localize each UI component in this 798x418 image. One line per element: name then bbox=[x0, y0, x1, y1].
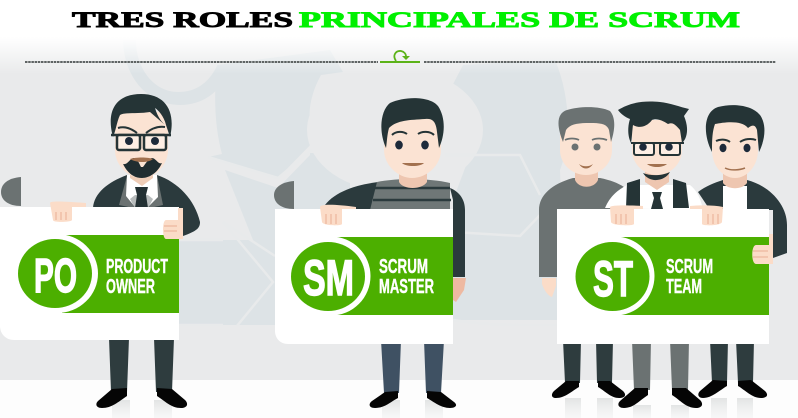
beard bbox=[123, 158, 162, 178]
hair bbox=[618, 101, 689, 143]
hands bbox=[50, 202, 183, 239]
role label: PRODUCT bbox=[106, 256, 168, 278]
lapels bbox=[119, 175, 163, 208]
eyes bbox=[395, 140, 403, 150]
panel: product owner bbox=[0, 94, 200, 408]
top white fade bbox=[0, 0, 798, 74]
role label: OWNER bbox=[106, 276, 155, 298]
t-shirt bbox=[723, 186, 747, 210]
hand bbox=[320, 205, 356, 225]
tie bbox=[651, 192, 663, 209]
figure: product owner bbox=[93, 94, 200, 408]
badge letters: PO bbox=[34, 250, 77, 303]
divider with recycle icon bbox=[25, 51, 776, 62]
badge letters: ST bbox=[593, 251, 633, 307]
eyes bbox=[572, 144, 578, 150]
role label: MASTER bbox=[379, 276, 434, 298]
eyes bbox=[125, 137, 133, 145]
hands bbox=[610, 205, 773, 264]
sign board bbox=[275, 209, 453, 344]
suit bbox=[93, 175, 200, 236]
watermark light strokes bbox=[170, 150, 566, 343]
badge letters: SM bbox=[303, 250, 354, 306]
panel: scrum team bbox=[539, 101, 787, 408]
role label: SCRUM bbox=[379, 256, 428, 278]
figure: middle team member bbox=[605, 101, 703, 408]
hair bbox=[706, 105, 764, 152]
shirt bbox=[605, 185, 703, 210]
eyebrows bbox=[118, 127, 165, 133]
hand bbox=[542, 278, 556, 297]
role label: TEAM bbox=[666, 276, 702, 298]
shoes bbox=[618, 388, 702, 408]
icon: recycle arrow bbox=[394, 51, 410, 61]
face bbox=[115, 110, 168, 178]
floor bbox=[0, 380, 798, 418]
badge ring bbox=[576, 236, 654, 316]
panel: scrum master bbox=[274, 98, 466, 408]
neck bbox=[130, 170, 153, 186]
vest bbox=[626, 179, 689, 208]
neck bbox=[399, 168, 427, 188]
sign board bbox=[557, 209, 769, 344]
legs bbox=[632, 340, 689, 390]
scroll curl bbox=[1, 177, 21, 206]
green band bbox=[335, 237, 453, 315]
face bbox=[712, 118, 758, 178]
shoe reflections bbox=[112, 398, 753, 418]
figure: right team member bbox=[698, 105, 787, 398]
shoes bbox=[96, 388, 187, 408]
role label bbox=[666, 256, 713, 298]
badge circle bbox=[18, 239, 92, 308]
shoes bbox=[370, 391, 456, 408]
badge ring bbox=[16, 234, 98, 313]
glasses bbox=[631, 143, 684, 155]
badge circle bbox=[576, 242, 650, 311]
eyes bbox=[720, 144, 726, 152]
mouth bbox=[725, 168, 745, 170]
hair bbox=[381, 98, 444, 148]
shoes bbox=[698, 380, 767, 398]
face bbox=[560, 122, 612, 175]
figure: grey team member bbox=[539, 107, 625, 398]
eyebrows bbox=[392, 132, 434, 135]
hair bbox=[111, 94, 172, 137]
neck bbox=[575, 168, 598, 187]
legs bbox=[710, 340, 754, 383]
role label bbox=[379, 256, 434, 298]
figure: scrum master bbox=[325, 98, 466, 408]
mouth bbox=[402, 163, 424, 166]
recycling symbol watermark bbox=[123, 40, 568, 325]
glasses bbox=[111, 135, 171, 150]
title bbox=[72, 7, 740, 32]
green band bbox=[620, 237, 769, 315]
mouth bbox=[647, 164, 667, 167]
eyebrows bbox=[716, 139, 756, 142]
scroll curl bbox=[274, 181, 294, 209]
mouth bbox=[579, 164, 593, 168]
arm and sweater bbox=[325, 182, 378, 210]
sign board bbox=[0, 207, 179, 340]
neck bbox=[723, 170, 747, 188]
face bbox=[384, 118, 441, 178]
green band bbox=[62, 235, 179, 313]
neck bbox=[645, 170, 669, 190]
legs bbox=[109, 338, 174, 392]
sweater bbox=[539, 178, 624, 277]
hair bbox=[558, 107, 614, 142]
goatee bbox=[643, 172, 670, 180]
face bbox=[632, 120, 682, 175]
role label: SCRUM bbox=[666, 256, 713, 278]
jacket bbox=[698, 180, 787, 258]
shoes bbox=[552, 381, 625, 398]
title green part: PRINCIPALES DE SCRUM bbox=[299, 7, 740, 32]
badge circle bbox=[291, 242, 365, 311]
title black part: TRES ROLES bbox=[72, 7, 293, 32]
legs bbox=[381, 340, 444, 393]
shirt and tie bbox=[126, 175, 158, 207]
eyes bbox=[639, 143, 647, 151]
badge ring bbox=[292, 236, 370, 316]
legs bbox=[563, 340, 613, 383]
lower hand bbox=[453, 278, 466, 302]
role label bbox=[106, 256, 168, 298]
lighter central blob bbox=[307, 68, 483, 192]
